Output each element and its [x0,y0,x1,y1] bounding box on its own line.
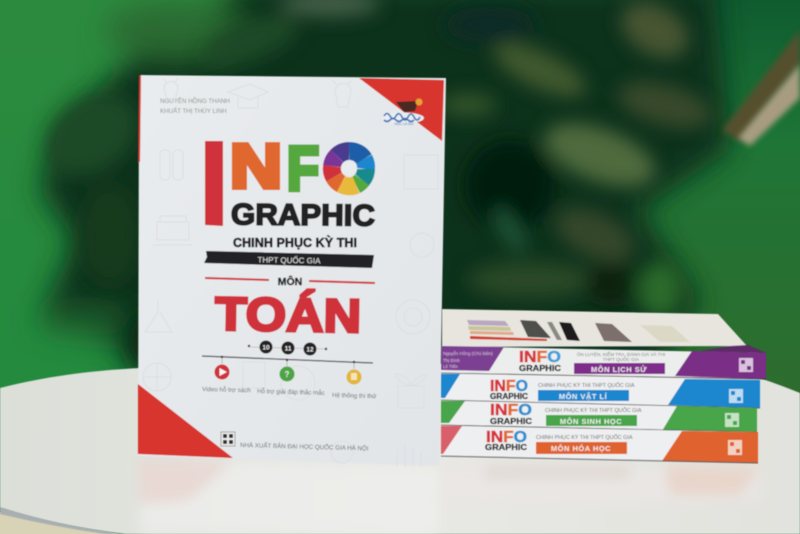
môn heading [205,275,375,288]
book: Môn Hóa Học: MÔN HÓA HỌC [551,444,611,453]
feature: test system [332,370,377,400]
I bar [205,141,223,226]
red strip top left [138,75,141,162]
title NF [230,132,319,204]
book: Môn Vật Lí: CHINH PHỤC KỲ THI THPT QUỐC GIA [538,382,635,389]
book: Môn Sinh Học: GRAPHIC [490,417,532,426]
grade badges: 12 [306,346,314,354]
faint background icons [143,78,438,466]
feature: support: ? [285,370,290,379]
black banner: THPT QUỐC GIA [257,254,321,266]
book: Môn Lịch Sử: Nguyễn Hồng (Chủ biên) [443,350,493,356]
book: Môn Vật Lí: MÔN VẬT LÍ [559,392,608,401]
publisher logo [382,98,424,126]
môn heading: MÔN [278,275,302,288]
book: Môn Lịch Sử: INFO [519,349,561,366]
book: Môn Hóa Học: INFO [486,429,527,446]
publisher imprint [221,432,369,452]
book: Môn Vật Lí [441,374,760,408]
feature: support [257,366,325,397]
table reflections [138,458,760,534]
book: Môn Vật Lí: INFO [490,378,528,395]
book: Môn Lịch Sử: ÔN LUYỆN, KIỂM TRA, ĐÁNH GIÁ VÀ THI [577,350,665,357]
book: Môn Sinh Học: CHINH PHỤC KỲ THI THPT QUỐC GIA [545,407,642,414]
black banner [204,251,374,268]
colour wheel O [332,151,366,186]
authors: KHUẤT THỊ THÙY LINH [160,108,227,115]
timeline [202,356,373,369]
publisher imprint: NHÀ XUẤT BẢN ĐẠI HỌC QUỐC GIA HÀ NỘI [240,442,369,452]
front book cover [138,75,446,466]
book: Môn Sinh Học [441,401,757,432]
book stack [441,309,766,463]
top face of stack [442,309,747,347]
book: Môn Lịch Sử: GRAPHIC [519,363,561,373]
book: Môn Sinh Học: INFO [490,402,532,419]
book: Môn Lịch Sử: Lê Tiến [443,364,458,369]
book: Môn Lịch Sử: Thị Bình [443,358,460,363]
feature: video [202,364,251,394]
white round table [0,360,800,534]
grade badges [248,340,327,356]
feature: support: Hỗ trợ giải đáp thắc mắc [257,388,325,397]
decorative blurred beige stick top right [722,30,800,146]
title NF: F [287,134,319,204]
subtitle: CHINH PHỤC KỲ THI [233,235,357,250]
title NF: N [230,132,282,202]
book: Môn Lịch Sử [441,345,766,379]
book: Môn Hóa Học: GRAPHIC [485,443,527,452]
book: Môn Vật Lí: GRAPHIC [490,392,528,401]
book: Môn Hóa Học: CHINH PHỤC KỲ THI THPT QUỐC GIA [536,434,633,441]
feature: test system: Hệ thống thi thử [332,392,377,400]
book: Môn Sinh Học: MÔN SINH HỌC [560,417,622,426]
feature: video: Video hỗ trợ sách [202,386,251,394]
authors: NGUYỄN HỒNG THANH [160,98,230,105]
TOÁN: TOÁN [215,287,362,342]
book: Môn Lịch Sử: THPT QUỐC GIA [603,356,640,362]
publisher logo: HỌC LÀ ĐỖ [394,121,414,126]
cover page [138,75,446,466]
book: Môn Hóa Học [441,426,758,463]
grade badges: 11 [285,346,292,352]
authors [160,98,230,115]
red corner bottom left [138,384,233,458]
GRAPHIC: GRAPHIC [231,198,375,233]
grade badges: 10 [262,344,270,352]
book: Môn Lịch Sử: MÔN LỊCH SỬ [591,365,647,374]
red corner top right [359,78,444,141]
